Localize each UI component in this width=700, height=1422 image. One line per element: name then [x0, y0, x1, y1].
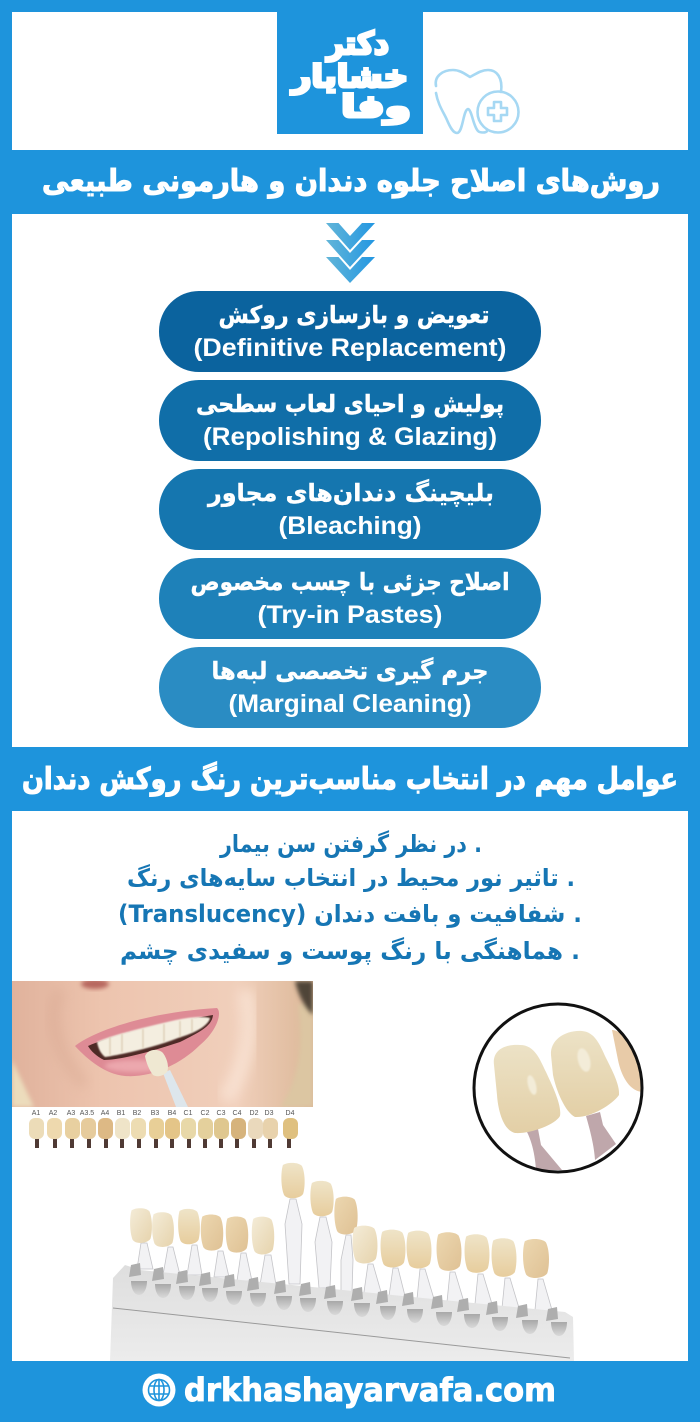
panel: factors and images: [12, 811, 688, 1361]
panel: header: [12, 12, 688, 150]
image: smile with shade tab: [12, 979, 313, 1107]
handles: [137, 1199, 552, 1316]
text block: factors list: . شفافیت و بافت دندان (Translucency): [118, 900, 582, 928]
arrow: triple chevron: [326, 223, 375, 283]
pill: bleaching: بلیچینگ دندان‌های مجاور: [207, 479, 494, 507]
pill: definitive replacement: (Definitive Replacement): [194, 334, 506, 362]
pill: marginal cleaning: [159, 647, 541, 728]
chart: shade tab strip: A2: [49, 1110, 57, 1117]
tray body: [110, 1265, 574, 1361]
pill: marginal cleaning: (Marginal Cleaning): [228, 690, 472, 718]
chart: shade tab strip: D4: [286, 1110, 295, 1117]
pill: repolishing and glazing: (Repolishing & Glazing): [203, 423, 497, 451]
chart: shade tab strip: D2: [250, 1110, 259, 1117]
text: website address: drkhashayarvafa.com: [184, 1371, 556, 1409]
shade tab: [163, 1070, 188, 1107]
pill: marginal cleaning: جرم گیری تخصصی لبه‌ها: [212, 657, 488, 685]
pill: repolishing and glazing: پولیش و احیای لعاب سطحی: [196, 390, 504, 418]
logo: doctor name: دکتر: [325, 26, 389, 62]
pill: definitive replacement: تعویض و بازسازی روکش: [218, 301, 490, 329]
logo: doctor name: وفا: [341, 89, 411, 125]
pill: bleaching: [159, 469, 541, 550]
pill: try-in pastes: اصلاح جزئی با چسب مخصوص: [190, 568, 510, 596]
chart: shade tab strip: A1: [32, 1110, 40, 1117]
teeth: [97, 1017, 210, 1057]
chart: shade tab strip: C2: [201, 1110, 210, 1117]
chart: shade tab strip: A4: [101, 1110, 109, 1117]
text block: factors list: [118, 830, 582, 965]
pill: repolishing and glazing: [159, 380, 541, 461]
pill: try-in pastes: (Try-in Pastes): [258, 601, 442, 629]
panel: methods list: [12, 214, 688, 747]
image: two veneers in circle: [474, 1004, 643, 1172]
footer: website: [142, 1371, 556, 1409]
chart: shade tab strip: B4: [168, 1110, 176, 1117]
chart: shade tab strip: C3: [217, 1110, 226, 1117]
logo: doctor name: [277, 12, 423, 134]
logo: doctor name: خشایار: [290, 59, 408, 95]
icon: tooth with plus: [436, 70, 518, 133]
lips: [75, 1008, 219, 1076]
chart: shade tab strip: B2: [133, 1110, 141, 1117]
text block: factors list: . تاثیر نور محیط در انتخاب سایه‌های رنگ: [127, 864, 575, 892]
chart: shade tab strip: B1: [117, 1110, 125, 1117]
icon: globe: [142, 1374, 176, 1406]
chart: shade tab strip: D3: [265, 1110, 274, 1117]
chart: shade tab strip: A3.5: [80, 1110, 94, 1117]
text block: factors list: . هماهنگی با رنگ پوست و سفیدی چشم: [120, 937, 580, 965]
chart: shade tab strip: [29, 1110, 298, 1148]
pill: definitive replacement: [159, 291, 541, 372]
pill: try-in pastes: [159, 558, 541, 639]
chart: shade tab strip: C1: [184, 1110, 193, 1117]
text block: factors list: . در نظر گرفتن سن بیمار: [219, 830, 482, 858]
chart: shade tab strip: C4: [233, 1110, 242, 1117]
image: shade guide tray: [110, 1163, 574, 1361]
chart: shade tab strip: A3: [67, 1110, 75, 1117]
pill: bleaching: (Bleaching): [278, 512, 422, 540]
shade teeth: [130, 1163, 549, 1278]
chart: shade tab strip: B3: [151, 1110, 159, 1117]
